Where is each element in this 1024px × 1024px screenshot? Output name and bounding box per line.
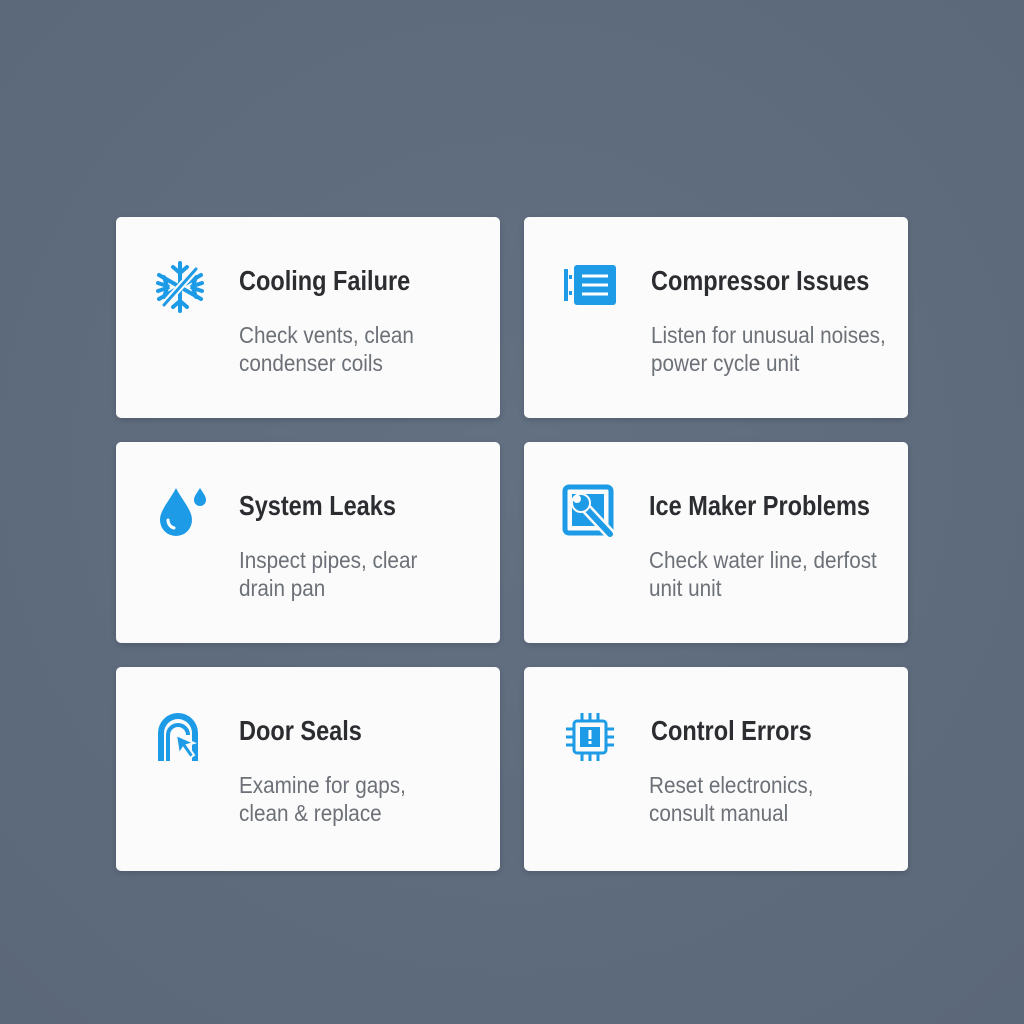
text	[239, 547, 418, 601]
panel: door seals	[116, 667, 500, 871]
text: clean & replace	[239, 800, 382, 826]
text: Inspect pipes, clear	[239, 547, 417, 573]
text	[651, 322, 886, 376]
heading: Control Errors	[651, 715, 812, 746]
panel: ice maker problems	[524, 442, 908, 643]
heading: Compressor Issues	[651, 265, 869, 296]
heading: Ice Maker Problems	[649, 490, 870, 521]
panel: system leaks	[116, 442, 500, 643]
heading: Door Seals	[239, 715, 362, 746]
panel: cooling failure	[116, 217, 500, 418]
text	[239, 322, 414, 376]
panel: control errors	[524, 667, 908, 871]
text: Listen for unusual noises,	[651, 322, 886, 348]
text: Examine for gaps,	[239, 772, 406, 798]
icon: snowflake	[156, 261, 204, 313]
heading: System Leaks	[239, 490, 396, 521]
text: consult manual	[649, 800, 788, 826]
text: condenser coils	[239, 350, 383, 376]
icon: wrench panel	[562, 484, 614, 537]
text: Reset electronics,	[649, 772, 814, 798]
panel: compressor issues	[524, 217, 908, 418]
text: Check water line, derfost	[649, 547, 877, 573]
text	[649, 547, 877, 601]
text: Check vents, clean	[239, 322, 414, 348]
icon: compressor	[564, 265, 616, 305]
text	[239, 772, 406, 826]
text: unit unit	[649, 575, 722, 601]
text	[649, 772, 814, 826]
heading: Cooling Failure	[239, 265, 410, 296]
icon: chip	[566, 713, 614, 761]
icon: door seal	[158, 713, 198, 761]
icon: water drops	[160, 488, 206, 536]
text: power cycle unit	[651, 350, 799, 376]
text: drain pan	[239, 575, 325, 601]
